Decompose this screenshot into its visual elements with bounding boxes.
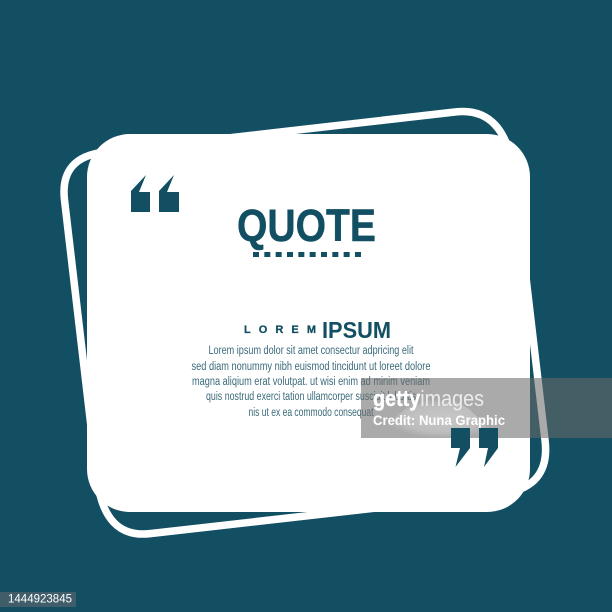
subheading: lorem ipsum: LOREM (244, 324, 316, 336)
heading: quote: QUOTE (237, 200, 376, 251)
body text: nis ut ex ea commodo consequat (248, 407, 374, 419)
image id badge: 1444923845 (8, 594, 72, 606)
body text: magna aliqium erat volutpat. ut wisi enim ad minim veniam (192, 376, 430, 388)
rotated outline frame (64, 112, 546, 534)
watermark band (361, 378, 612, 438)
dotted divider under heading (253, 252, 361, 257)
subheading: lorem ipsum (244, 317, 391, 343)
icon: closing quote marks (451, 428, 498, 467)
subheading: lorem ipsum: IPSUM (322, 317, 391, 343)
watermark credit text: Credit: Nuna Graphic (373, 413, 505, 428)
watermark logo text: gettyimages (373, 386, 484, 411)
icon: opening quote marks (131, 175, 179, 212)
body text: sed diam nonummy nibh euismod tincidunt ut loreet dolore (192, 361, 430, 373)
body text: Lorem ipsum dolor sit amet consectur adpricing elit (208, 345, 414, 357)
body text: quis nostrud exerci tation ullamcorper suscipit lobortis (206, 391, 416, 403)
body text (192, 345, 430, 419)
main white panel (87, 134, 530, 512)
image id badge (0, 592, 76, 607)
